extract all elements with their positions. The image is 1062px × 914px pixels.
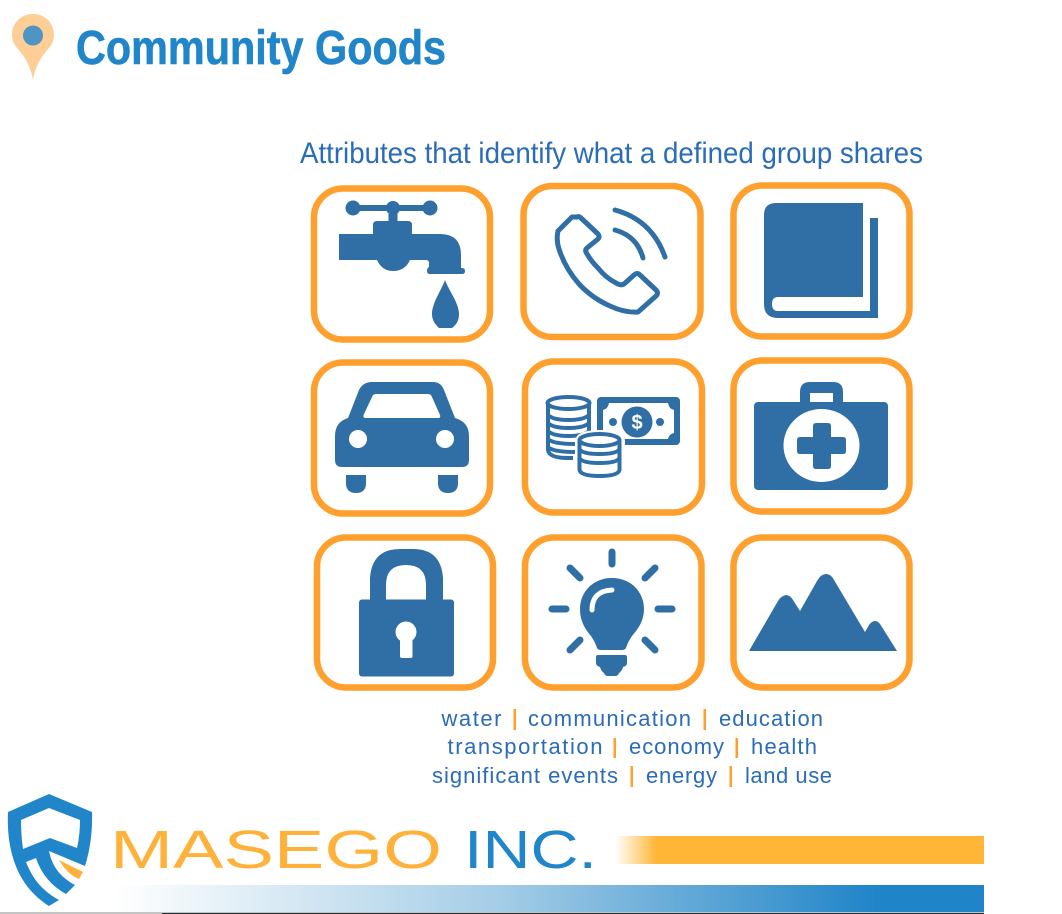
icon: coins and banknote [548,397,680,481]
logo wordmark [110,820,597,880]
orange footer band [615,836,984,864]
logo wordmark: MASEGO [110,820,442,880]
subtitle: Attributes that identify what a defined group shares [300,137,923,170]
panel: communication [524,186,700,337]
labels: row 1: communication [528,706,691,731]
icon: padlock [359,549,454,676]
icon: faucet [339,200,465,328]
blue footer band [115,885,984,912]
labels: row 1 [440,706,823,731]
bottom edge line [0,912,984,914]
panel: education [734,186,910,336]
logo: shield [8,794,92,906]
labels: row 3 [432,763,832,788]
labels: row 3: significant events [432,763,618,788]
panel: transportation [314,362,490,514]
logo wordmark: INC. [464,820,597,880]
labels: row 2: economy [629,734,724,759]
panel: economy [525,362,702,512]
title: Community Goods [76,22,446,75]
labels: row 3: energy [646,763,717,788]
icon: mountains [749,574,897,651]
labels: row 1: education [719,706,823,731]
panel: health [734,360,910,512]
labels: row 1: water [440,706,502,731]
labels: row 2 [448,734,817,759]
icon: light bulb [552,552,672,676]
labels: row 2: transportation [448,734,602,759]
icon: car [335,382,469,493]
panel: security [317,538,493,688]
panel: energy [525,538,702,688]
labels: row 2: health [751,734,817,759]
labels: row 3: land use [745,763,832,788]
icon: book [764,203,878,318]
icon: coins and banknote: $ [631,412,643,434]
icon: medical kit [754,382,888,490]
panel: water [314,188,490,340]
icon: telephone [557,210,665,312]
panel: land use [734,538,910,688]
icon: map pin [12,14,54,80]
